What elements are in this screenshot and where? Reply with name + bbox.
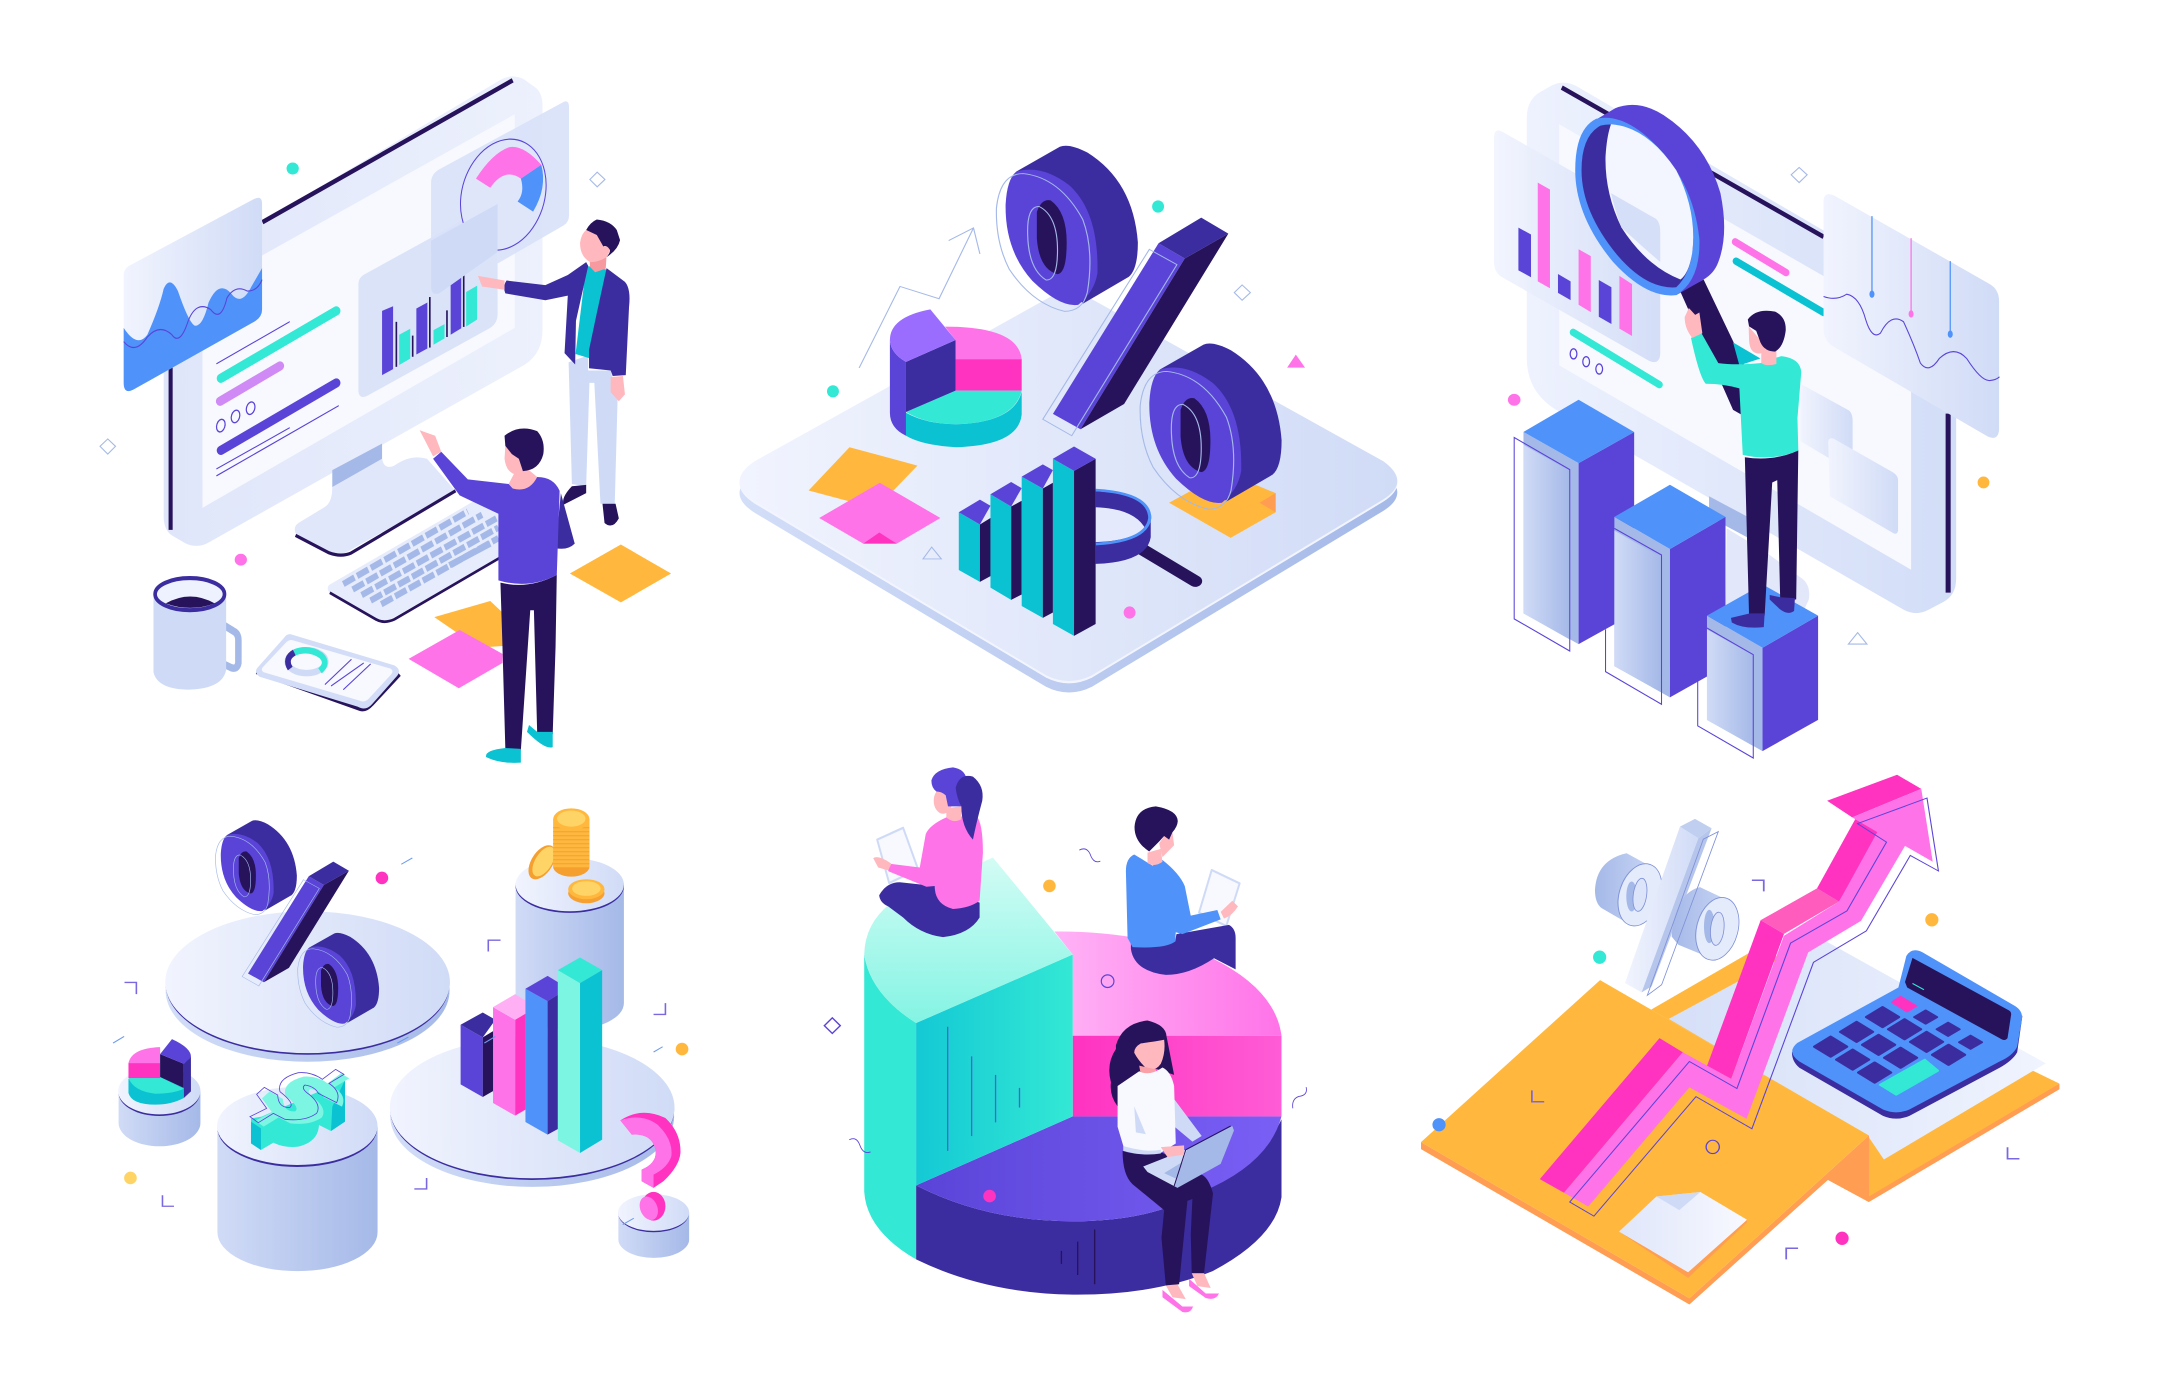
3d bar chart [461, 957, 602, 1153]
panel: area chart card [124, 198, 262, 391]
scene: discs and cylinders with coins and charts [113, 808, 689, 1271]
scene: monitor dashboard with two analysts [100, 76, 671, 763]
small pie cylinder [118, 1068, 200, 1146]
screen text bars [1570, 242, 1824, 385]
icon: coffee mug [153, 578, 238, 690]
panel: bar chart card [358, 204, 498, 397]
3d bar chart [959, 446, 1096, 636]
scene: rising arrow on folder with calculator [1421, 775, 2059, 1304]
person: man with tablet on pink slice [1126, 806, 1240, 975]
percent sign: top zero [215, 820, 297, 915]
accent dashes and dots [113, 858, 688, 1225]
column: medium box [1606, 485, 1725, 704]
percent sign: slash [242, 862, 349, 986]
percent sign: slash [1043, 218, 1228, 436]
scene: percent sign on platform [740, 146, 1397, 693]
column: tall box [1514, 400, 1634, 651]
percent sign: bottom zero [298, 933, 379, 1027]
pie chart: pink slice side [1073, 1036, 1282, 1116]
person: standing analyst pointing at chart [478, 219, 630, 526]
pie chart: purple slice top [916, 1116, 1282, 1221]
person: analyst seen from behind pointing at screen [420, 429, 575, 763]
folder: back plane [1651, 938, 2059, 1202]
3d pie chart [128, 1039, 191, 1105]
3d pie chart [890, 309, 1022, 447]
scene: people on giant pie chart [824, 767, 1306, 1312]
keyboard [328, 501, 500, 622]
accent dots and shapes [1508, 167, 1989, 644]
accent dots and triangles [827, 200, 1305, 619]
person: woman with tablet on teal wedge [873, 767, 983, 937]
icon: coin stacks [523, 808, 605, 903]
person: woman with laptop on purple slice [1109, 1020, 1234, 1312]
monitor stand [1709, 496, 1809, 611]
sticky note [1619, 1192, 1747, 1278]
accent dots and brackets [1432, 880, 2019, 1259]
icon: giant magnifying glass [1575, 105, 1744, 416]
cylinder with coins [516, 858, 624, 1030]
monitor body [164, 76, 542, 546]
screen text bars [215, 311, 338, 476]
arrow outline [859, 228, 980, 368]
person: analyst holding magnifying glass [1685, 308, 1801, 628]
icon: calculator [1792, 950, 2022, 1119]
pie chart: raised teal wedge [864, 857, 1073, 1259]
small cylinder with question mark [618, 1194, 689, 1258]
accent dots and diamonds [100, 163, 605, 566]
accent dots, circles and squiggles [824, 849, 1306, 1202]
sticky notes [409, 545, 671, 688]
rising arrow [1540, 775, 1938, 1216]
icon: question mark [620, 1113, 680, 1222]
monitor stand [295, 444, 456, 555]
column: short box [1698, 584, 1818, 758]
platform: top disc [165, 911, 450, 1062]
pie chart: pink slice top [1054, 931, 1282, 1036]
percent sign: bottom zero [1140, 344, 1282, 509]
icon: phone with donut chart [256, 634, 400, 710]
platform: right disc [390, 1037, 675, 1187]
pie chart: navy slice side [916, 1119, 1282, 1295]
scene: magnifying glass over bar columns [1494, 83, 1999, 758]
sticky notes [809, 447, 1276, 544]
panel: right line chart card [1824, 194, 1999, 438]
icon: 3d dollar sign [250, 1069, 349, 1150]
icon: magnifying glass [1096, 490, 1195, 581]
monitor body [1527, 83, 1956, 613]
panel: gauge card [431, 101, 569, 294]
folder: front plane [1421, 980, 1869, 1304]
corner brackets [125, 940, 665, 1206]
panel: lower screen cards [1800, 384, 1898, 534]
platform base [740, 291, 1397, 693]
large cylinder [217, 1087, 378, 1271]
tick marks on navy side [1061, 1229, 1095, 1284]
percent sign: top zero [996, 146, 1138, 311]
ghost percent sign [1595, 819, 1746, 995]
panel: left bar chart card [1494, 131, 1660, 362]
